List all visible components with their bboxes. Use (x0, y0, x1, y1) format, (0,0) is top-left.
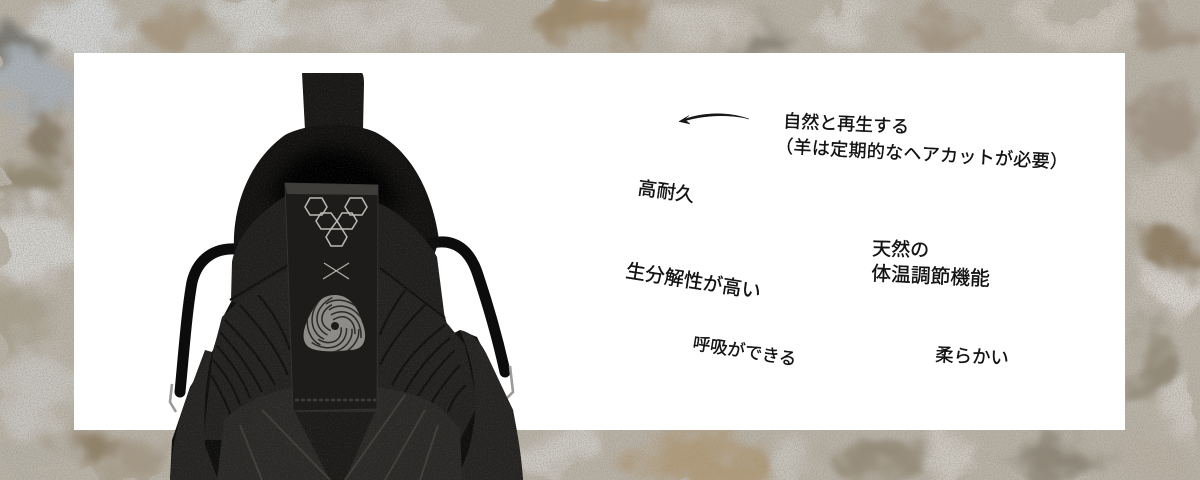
laces (180, 242, 505, 392)
text: thermoregulating (871, 238, 991, 291)
strap stitching (295, 399, 376, 401)
text: renewable: 自然と再生する (783, 111, 910, 137)
pull tab (302, 73, 364, 130)
label strap (285, 183, 378, 411)
text: durable: 高耐久 (636, 177, 696, 207)
knit ribs (211, 265, 466, 414)
text: thermoregulating: 体温調節機能 (871, 263, 991, 291)
text: biodegradable: 生分解性が高い (624, 260, 762, 303)
vamp ridges (240, 395, 438, 480)
heel collar (234, 125, 439, 300)
left shoe body (170, 350, 218, 480)
lower ribbed knit (203, 272, 478, 440)
text: thermoregulating: 天然の (872, 238, 929, 261)
right side panel (455, 330, 523, 480)
shoe illustration (160, 70, 530, 480)
text: soft: 柔らかい (935, 344, 1009, 368)
metal eyelets (170, 366, 513, 412)
icon: cross mark (323, 263, 349, 279)
upper knit tongue (231, 195, 445, 345)
text: renewable: （羊は定期的なヘアカットが必要） (775, 136, 1068, 172)
text: breathable: 呼吸ができる (691, 333, 798, 369)
vamp centre wedge (295, 412, 375, 480)
central vamp (217, 384, 462, 480)
logo spiral lines (306, 297, 362, 352)
texture overlay (160, 70, 530, 480)
arrow (679, 114, 749, 124)
logo fill (304, 295, 365, 351)
white panel (74, 53, 1125, 430)
strap top highlight (285, 183, 378, 195)
text: renewable (775, 111, 1068, 172)
icon: wool spiral logo (304, 295, 366, 352)
collar inner shadow (270, 148, 402, 212)
shoe silhouette base (170, 300, 523, 480)
icon: honeycomb (305, 198, 367, 246)
